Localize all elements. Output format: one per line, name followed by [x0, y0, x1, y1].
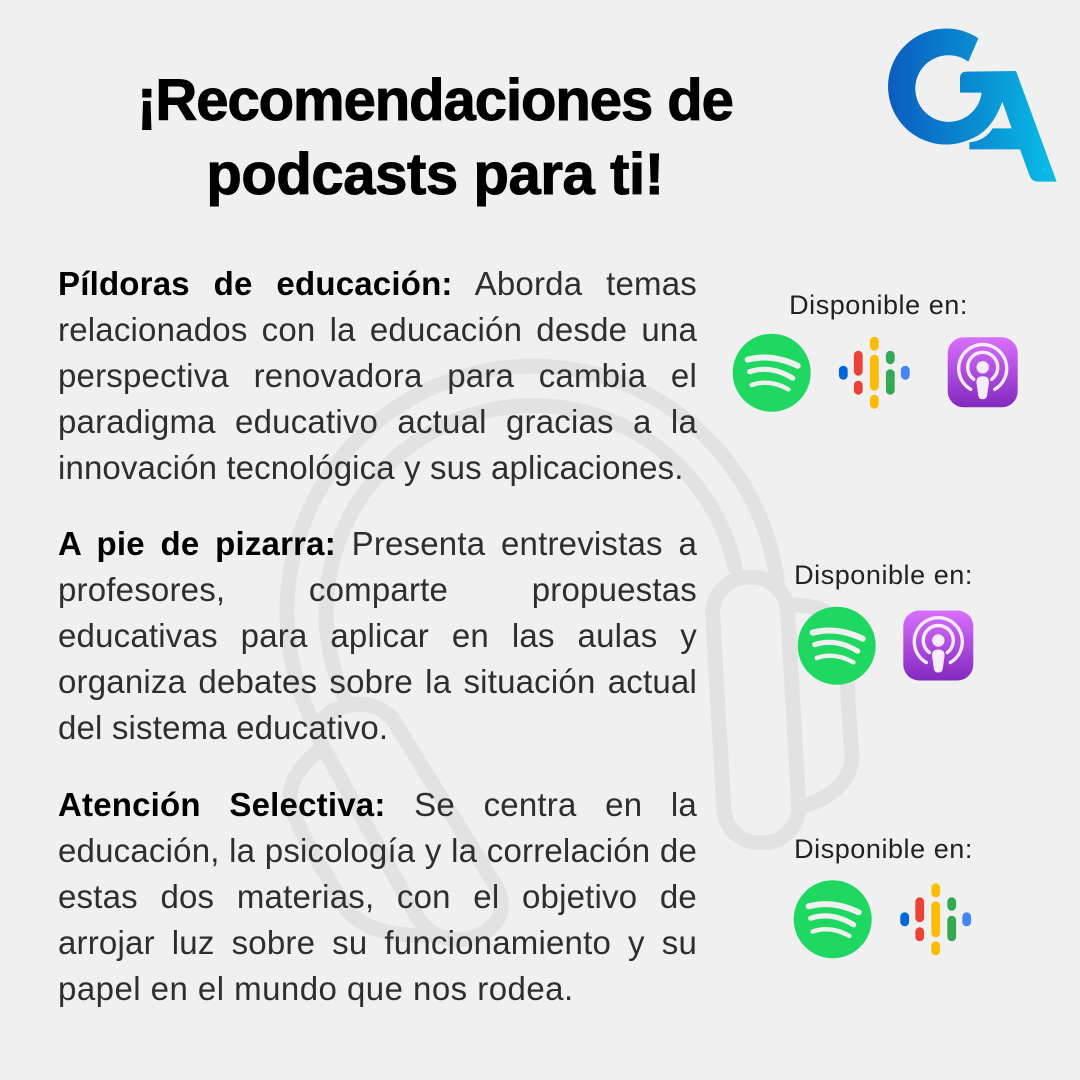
text block: Atención Selectiva: arrojar luz sobre su funcionamiento y su	[58, 924, 697, 961]
panel: availability 3	[794, 834, 973, 958]
text block: Píldoras de educación: perspectiva renovadora para cambia el	[58, 357, 697, 394]
icon: Google Podcasts	[900, 883, 971, 955]
text block: A pie de pizarra: profesores, comparte propuestas	[58, 571, 697, 608]
background headphones watermark	[280, 358, 860, 947]
icon: Spotify	[798, 607, 876, 685]
title	[137, 68, 733, 207]
text block: Atención Selectiva: papel en el mundo que nos rodea.	[58, 970, 574, 1007]
text block: Píldoras de educación: Píldoras de educación: Aborda temas	[58, 265, 697, 302]
icon: Google Podcasts	[839, 337, 910, 409]
label: Disponible en: Disponible en:	[794, 560, 973, 590]
title: ¡Recomendaciones de	[137, 68, 733, 133]
icon: Spotify	[733, 334, 811, 412]
panel: availability 1	[732, 290, 1018, 412]
icon: Spotify	[794, 880, 872, 958]
text block: A pie de pizarra: del sistema educativo.	[58, 709, 388, 746]
text block: Atención Selectiva: estas dos materias, con el objetivo de	[58, 878, 697, 915]
text block: Píldoras de educación: relacionados con la educación desde una	[58, 311, 697, 348]
text block: Atención Selectiva: educación, la psicología y la correlación de	[58, 832, 697, 869]
panel: availability 2	[794, 560, 974, 685]
text block: Atención Selectiva	[58, 786, 697, 1007]
icon: Apple Podcasts	[948, 337, 1018, 407]
icon: Apple Podcasts	[903, 610, 973, 680]
logo: GA	[888, 28, 1057, 182]
text block: Píldoras de educación: paradigma educativo actual gracias a la	[58, 403, 697, 440]
label: Disponible en: Disponible en:	[789, 290, 968, 320]
text block: Píldoras de educación: innovación tecnológica y sus aplicaciones.	[58, 449, 684, 486]
label: Disponible en: Disponible en:	[794, 834, 973, 864]
title: podcasts para ti!	[206, 142, 664, 207]
text block: A pie de pizarra: A pie de pizarra: Presenta entrevistas a	[58, 525, 697, 562]
text block: A pie de pizarra: organiza debates sobre la situación actual	[58, 663, 697, 700]
text block: A pie de pizarra: educativas para aplicar en las aulas y	[58, 617, 697, 654]
text block: A pie de pizarra	[58, 525, 697, 746]
text block: Píldoras de educación	[58, 265, 697, 486]
text block: Atención Selectiva: Atención Selectiva: Se centra en la	[58, 786, 697, 823]
